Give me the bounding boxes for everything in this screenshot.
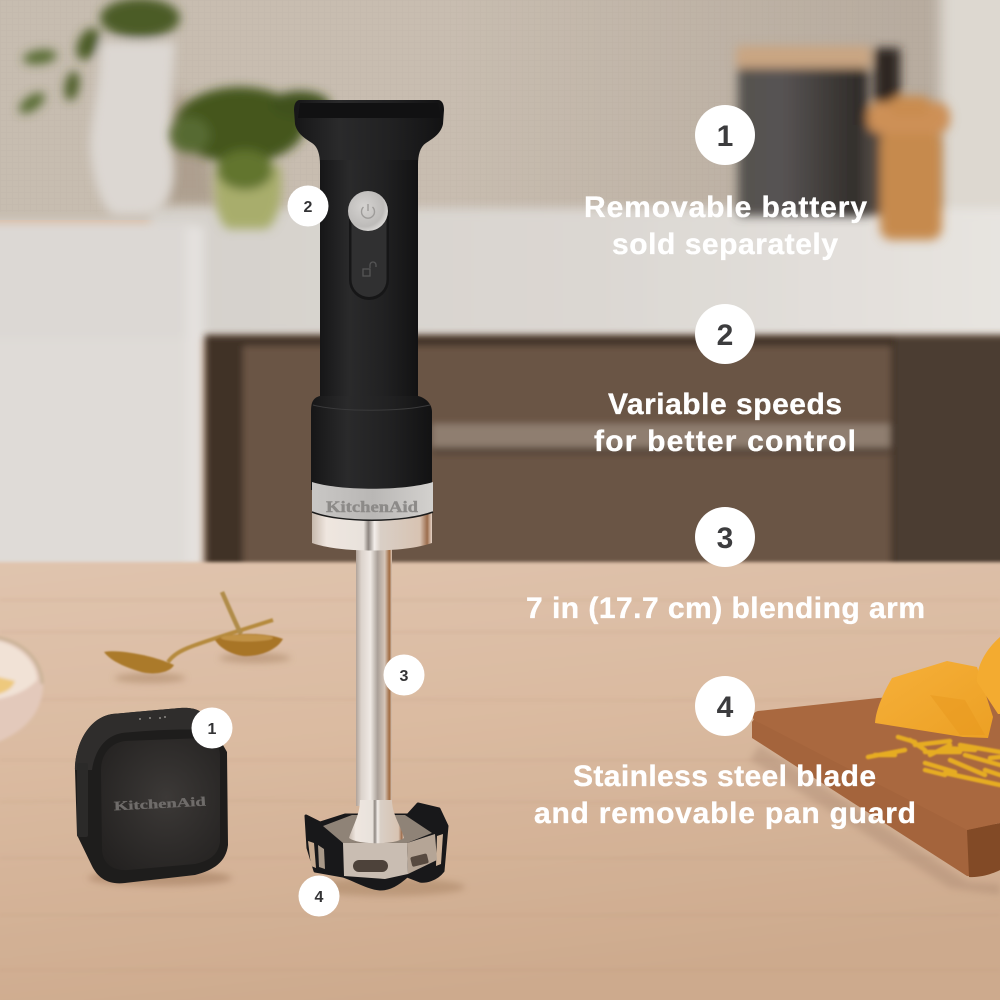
caption 3: 7 in (17.7 cm) blending arm bbox=[526, 592, 925, 625]
caption 2: for better control bbox=[594, 425, 856, 458]
marker 2 on handle: 2 bbox=[304, 199, 313, 216]
silver brand band bbox=[312, 482, 433, 520]
board side bbox=[752, 711, 1000, 876]
icon: unlock bbox=[363, 262, 376, 276]
background: blurred kitchen bbox=[0, 0, 1000, 576]
caption 4: and removable pan guard bbox=[534, 797, 916, 830]
cheese block bbox=[875, 661, 993, 738]
cap opening bbox=[298, 103, 441, 118]
number badge 2: 2 bbox=[717, 319, 733, 352]
cheese wedge bbox=[977, 637, 1000, 714]
marker 3 on arm bbox=[384, 654, 424, 696]
pan guard bbox=[306, 804, 447, 889]
caption 2: Variable speeds bbox=[608, 388, 842, 421]
battery body bbox=[75, 708, 228, 883]
cheese bbox=[868, 637, 1000, 785]
wall tiles bbox=[0, 0, 1000, 220]
feature 3 bbox=[526, 507, 925, 625]
board top bbox=[753, 690, 1000, 830]
arm bell bbox=[349, 800, 404, 843]
battery pack bbox=[75, 708, 232, 886]
shredded cheese bbox=[868, 737, 1000, 785]
blending arm bbox=[356, 548, 392, 806]
hand blender bbox=[294, 100, 465, 896]
marker 1 on battery bbox=[192, 708, 232, 748]
number badge 4 bbox=[695, 676, 755, 736]
number badge 3 bbox=[695, 507, 755, 567]
counter and sink bbox=[0, 208, 1000, 573]
cutting board bbox=[750, 690, 1000, 895]
battery face bbox=[101, 738, 220, 870]
blade top surface bbox=[323, 815, 432, 843]
lower collar bbox=[311, 396, 432, 490]
indicator dots bbox=[139, 716, 166, 720]
marker 4 on blade: 4 bbox=[315, 889, 324, 906]
cap bbox=[294, 100, 444, 190]
battery shadow bbox=[88, 870, 232, 886]
caption 1: Removable battery bbox=[584, 191, 867, 224]
blade centre panel bbox=[343, 843, 408, 879]
control strip bbox=[349, 192, 389, 300]
number badge 4: 4 bbox=[717, 691, 734, 724]
marker 4 on blade bbox=[298, 876, 340, 916]
wood grain bbox=[0, 600, 1000, 970]
chrome neck bbox=[312, 510, 432, 550]
number badge 1 bbox=[695, 105, 755, 165]
right opening bbox=[436, 834, 443, 866]
caption 4: Stainless steel blade bbox=[573, 760, 876, 793]
marker 1 on battery: 1 bbox=[208, 721, 217, 738]
vase with plant bbox=[16, 0, 180, 215]
table top bbox=[0, 562, 1000, 1000]
number badge 2 bbox=[695, 304, 755, 364]
side latch bbox=[77, 763, 88, 837]
handle bbox=[320, 160, 418, 410]
board shadow bbox=[750, 745, 1000, 895]
number badge 1: 1 bbox=[717, 120, 733, 153]
potted herb bbox=[170, 87, 330, 229]
blade right panel bbox=[407, 834, 437, 874]
right wall and shadows on shelf bbox=[165, 0, 1000, 260]
feature 4 bbox=[534, 676, 916, 830]
left openings bbox=[308, 841, 316, 868]
canister, bottle and pepper mill bbox=[736, 46, 950, 240]
slot bbox=[410, 853, 429, 867]
brand text: KitchenAid bbox=[326, 499, 418, 516]
guard silhouette bbox=[306, 804, 447, 889]
brand text: KitchenAid bbox=[113, 794, 207, 813]
marker 3 on arm: 3 bbox=[400, 668, 409, 685]
number badge 3: 3 bbox=[717, 522, 733, 555]
feature 2 bbox=[594, 304, 856, 458]
cabinets bbox=[205, 335, 1000, 576]
icon: power bbox=[361, 204, 375, 218]
contact shadow bbox=[305, 878, 465, 896]
power button bbox=[348, 191, 388, 231]
marker 2 on handle bbox=[288, 186, 328, 226]
slot bbox=[353, 860, 388, 872]
bowl bbox=[0, 636, 43, 745]
caption 1: sold separately bbox=[612, 228, 838, 261]
feature 1 bbox=[584, 105, 867, 261]
spoons bbox=[104, 592, 291, 683]
